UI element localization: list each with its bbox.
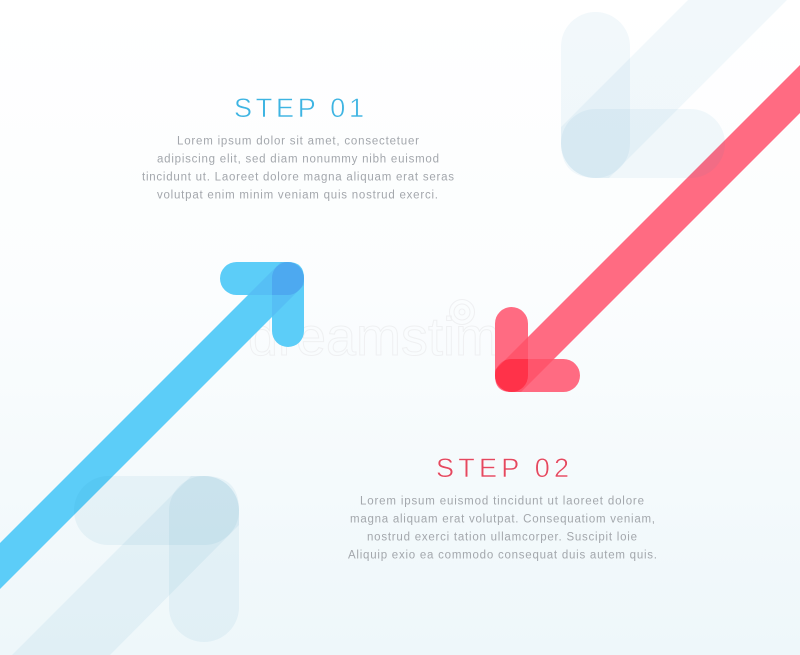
text block: step 01 body: volutpat enim minim veniam quis nostrud exerci. <box>157 190 438 202</box>
ghost arrow: top right <box>561 0 787 178</box>
watermark: dreamstime <box>248 307 530 367</box>
text block: step 02 body <box>348 496 657 562</box>
text block: step 02 body: Aliquip exio ea commodo consequat duis autem quis. <box>348 550 657 562</box>
step 02 block <box>348 453 657 562</box>
step 01 block <box>142 93 454 202</box>
heading: step 01: STEP 01 <box>234 93 364 123</box>
text block: step 02 body: nostrud exerci tation ullamcorper. Suscipit loie <box>367 532 637 544</box>
text block: step 01 body: tincidunt ut. Laoreet dolore magna aliquam erat seras <box>142 172 454 184</box>
text block: step 01 body: Lorem ipsum dolor sit amet, consectetuer <box>177 136 419 148</box>
text block: step 02 body: magna aliquam erat volutpat. Consequatiom veniam, <box>350 514 655 526</box>
text block: step 01 body: adipiscing elit, sed diam nonummy nibh euismod <box>157 154 439 166</box>
text block: step 02 body: Lorem ipsum euismod tincidunt ut laoreet dolore <box>360 496 644 508</box>
heading: step 02: STEP 02 <box>436 453 569 483</box>
ghost arrow: bottom left <box>12 476 239 655</box>
text block: step 01 body <box>142 136 454 202</box>
arrow: red down-left <box>495 65 800 392</box>
arrow: blue up-right <box>0 262 304 589</box>
